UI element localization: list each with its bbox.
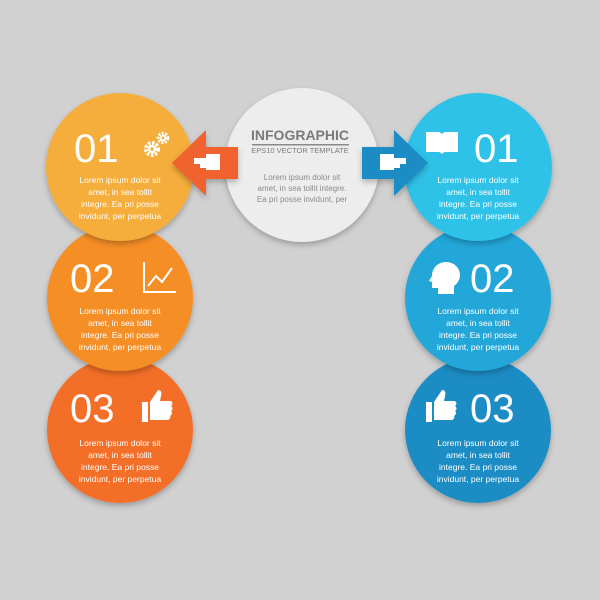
icon: gears bbox=[146, 134, 168, 155]
left circle 2: 02 bbox=[70, 257, 114, 301]
left circle 3: integre. Ea pri posse bbox=[81, 462, 159, 472]
right circle 2: 02 bbox=[470, 257, 514, 301]
arrow: blue right bbox=[362, 130, 428, 196]
left circle 3: Lorem ipsum dolor sit bbox=[79, 438, 161, 448]
icon: head bbox=[429, 262, 460, 294]
right circle 3: 03 bbox=[470, 387, 514, 431]
left circle 1: 01 bbox=[74, 127, 118, 171]
left circle 3: invidunt, per perpetua bbox=[79, 474, 161, 484]
left circle 1: invidunt, per perpetua bbox=[79, 211, 161, 221]
right circle 3 bbox=[405, 357, 551, 503]
left circle 1: Lorem ipsum dolor sit bbox=[79, 175, 161, 185]
right circle 1: integre. Ea pri posse bbox=[439, 199, 517, 209]
left circle 3: amet, in sea tollit bbox=[88, 450, 153, 460]
right circle 3: Lorem ipsum dolor sit bbox=[437, 438, 519, 448]
left circle 1: amet, in sea tollit bbox=[88, 187, 153, 197]
left circle 2: integre. Ea pri posse bbox=[81, 330, 159, 340]
center circle: EPS10 VECTOR TEMPLATE bbox=[251, 146, 349, 155]
left circle 1: integre. Ea pri posse bbox=[81, 199, 159, 209]
right circle 2: invidunt, per perpetua bbox=[437, 342, 519, 352]
right circle 1: Lorem ipsum dolor sit bbox=[437, 175, 519, 185]
right circle 3: amet, in sea tollit bbox=[446, 450, 511, 460]
icon: book bbox=[426, 132, 458, 154]
right circle 1: invidunt, per perpetua bbox=[437, 211, 519, 221]
right circle 3: invidunt, per perpetua bbox=[437, 474, 519, 484]
right circle 2: amet, in sea tollit bbox=[446, 318, 511, 328]
left circle 3 bbox=[47, 357, 193, 503]
left circle 3: 03 bbox=[70, 387, 114, 431]
center circle: INFOGRAPHIC bbox=[251, 127, 349, 143]
right circle 2 bbox=[405, 225, 551, 371]
left circle 2: amet, in sea tollit bbox=[88, 318, 153, 328]
right circle 3: integre. Ea pri posse bbox=[439, 462, 517, 472]
right circle 1: amet, in sea tollit bbox=[446, 187, 511, 197]
center circle: Lorem ipsum dolor sit bbox=[264, 173, 341, 182]
left circle 1 bbox=[46, 93, 194, 241]
icon: thumbs up bbox=[142, 390, 172, 422]
right circle 2: Lorem ipsum dolor sit bbox=[437, 306, 519, 316]
right circle 2: integre. Ea pri posse bbox=[439, 330, 517, 340]
center circle bbox=[225, 88, 379, 242]
icon: thumbs up bbox=[426, 390, 456, 422]
right circle 1 bbox=[404, 93, 552, 241]
left circle 2: invidunt, per perpetua bbox=[79, 342, 161, 352]
center circle: Ea pri posse invidunt, per bbox=[257, 195, 347, 204]
right circle 1: 01 bbox=[474, 127, 518, 171]
left circle 2 bbox=[47, 225, 193, 371]
icon: chart bbox=[144, 262, 176, 292]
left circle 2: Lorem ipsum dolor sit bbox=[79, 306, 161, 316]
center circle: amet, in sea tollit integre. bbox=[258, 184, 346, 193]
arrow: orange left bbox=[172, 130, 238, 196]
